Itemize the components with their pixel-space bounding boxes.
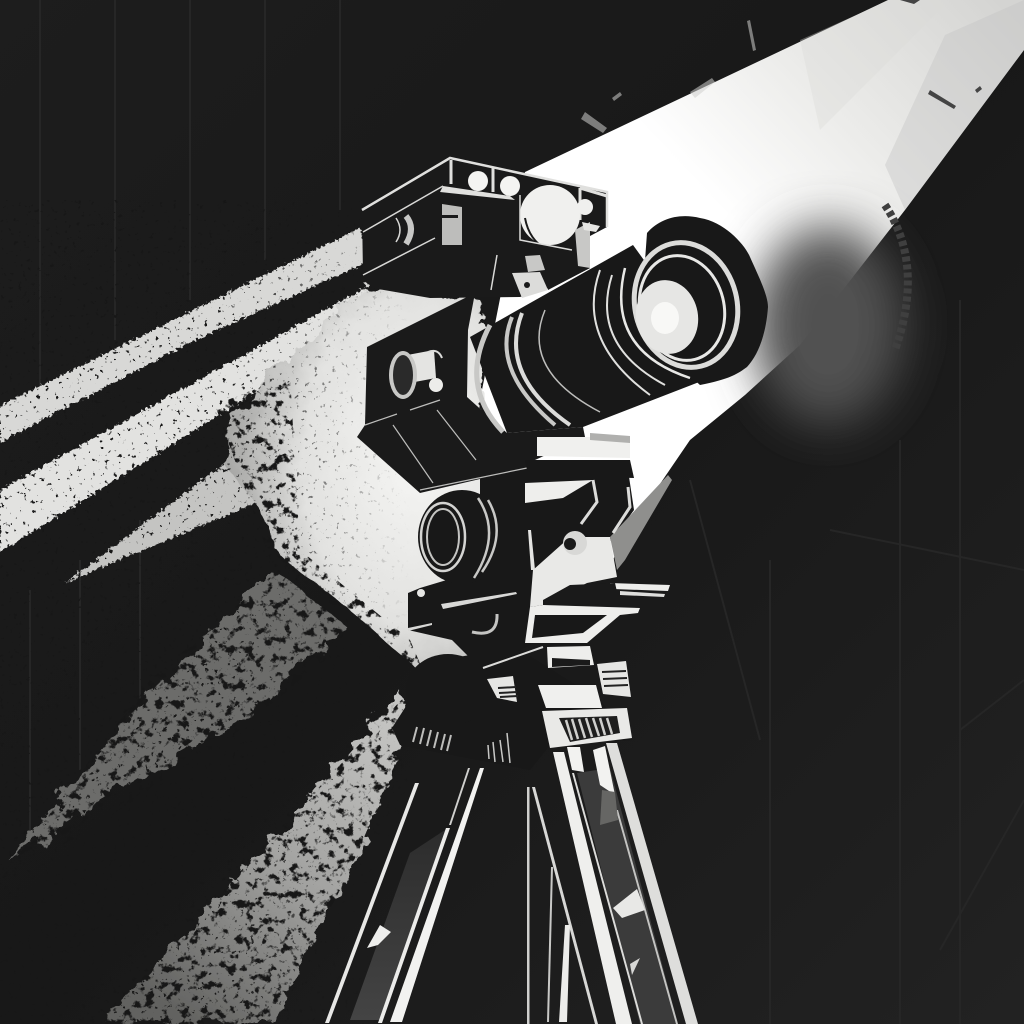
telephoto lens xyxy=(470,216,768,433)
grit specks at the beam top edge xyxy=(581,0,982,133)
dust cloud behind camera xyxy=(225,285,490,672)
lens halo in the shadow xyxy=(752,205,908,425)
large viewfinder disc xyxy=(520,185,580,245)
white bracket plates xyxy=(530,537,617,607)
lower bracket xyxy=(525,255,545,272)
top mounted viewfinder xyxy=(362,158,607,298)
lens glass xyxy=(620,230,752,380)
top plate xyxy=(537,437,630,458)
tripod centre leg xyxy=(527,787,598,1024)
grey latch xyxy=(442,204,462,245)
mottled specks on lower streaks xyxy=(30,380,420,1024)
side knob ellipse xyxy=(418,490,506,584)
fine specks over the rays xyxy=(0,200,404,1024)
dark head mass xyxy=(392,650,632,770)
left light rays xyxy=(0,228,385,583)
side lens xyxy=(402,350,436,384)
tripod left leg xyxy=(325,768,484,1023)
frame outline xyxy=(362,158,607,227)
camera body xyxy=(357,293,634,493)
small side lens xyxy=(406,216,411,244)
dark streak texture xyxy=(8,570,405,1022)
body highlight lines xyxy=(365,400,527,490)
tripod right leg xyxy=(553,743,698,1024)
main spotlight beam xyxy=(480,0,1024,565)
tripod head mount xyxy=(392,646,632,770)
pan-tilt head xyxy=(408,465,672,668)
tripod xyxy=(325,743,698,1024)
lens hood xyxy=(640,216,768,385)
